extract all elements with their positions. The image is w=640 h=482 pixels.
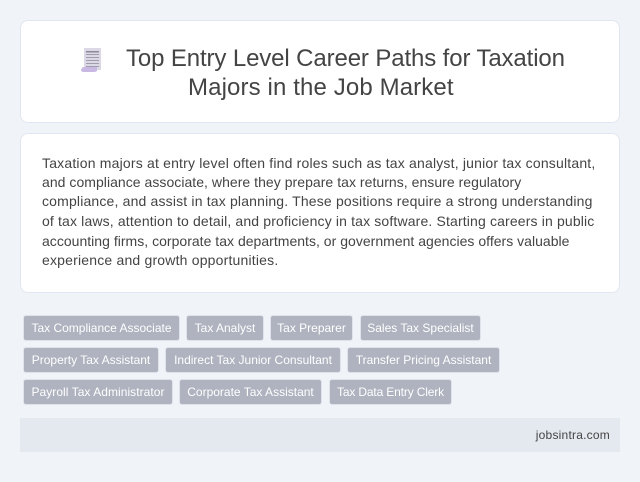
tag: Sales Tax Specialist [367, 321, 474, 335]
footer bar [20, 418, 620, 452]
tag: Tax Data Entry Clerk [337, 385, 444, 399]
text block: description: of tax laws, attention to detail, and proficiency in tax software. Starting careers in public [42, 213, 594, 229]
tag: Tax Preparer [277, 321, 346, 335]
icon: tax receipt scroll [81, 48, 101, 72]
tag [329, 379, 452, 405]
tag: Indirect Tax Junior Consultant [174, 353, 332, 367]
tag [23, 379, 173, 405]
tag: Corporate Tax Assistant [187, 385, 314, 399]
tag: Transfer Pricing Assistant [356, 353, 491, 367]
text block: description: accounting firms, corporate tax departments, or government agencies offers valuable [42, 233, 569, 249]
tag [270, 315, 353, 341]
panel: title card [20, 20, 620, 123]
title [126, 45, 565, 101]
text block: description: Taxation majors at entry level often find roles such as tax analyst, junior tax consultant, [42, 155, 595, 171]
tag: Tax Analyst [195, 321, 255, 335]
tag [360, 315, 481, 341]
text block: description: compliance, and assist in tax planning. These positions require a strong understanding [42, 193, 593, 209]
tag list [23, 315, 500, 405]
tag: Payroll Tax Administrator [31, 385, 165, 399]
text block: description [42, 155, 595, 268]
text block: description: and compliance associate, where they prepare tax returns, ensure regulatory [42, 174, 521, 190]
footer text: source: jobsintra.com [536, 428, 610, 442]
tag [165, 347, 341, 373]
panel: title card: Majors in the Job Market [188, 74, 454, 101]
panel: description [20, 133, 620, 293]
text block: description: experience and growth opportunities. [42, 252, 278, 268]
tag [347, 347, 500, 373]
tag: Property Tax Assistant [32, 353, 150, 367]
tag: Tax Compliance Associate [31, 321, 172, 335]
panel: title card: Top Entry Level Career Paths for Taxation [126, 45, 565, 72]
tag [23, 347, 159, 373]
tag [23, 315, 180, 341]
tag [186, 315, 264, 341]
tag [179, 379, 322, 405]
